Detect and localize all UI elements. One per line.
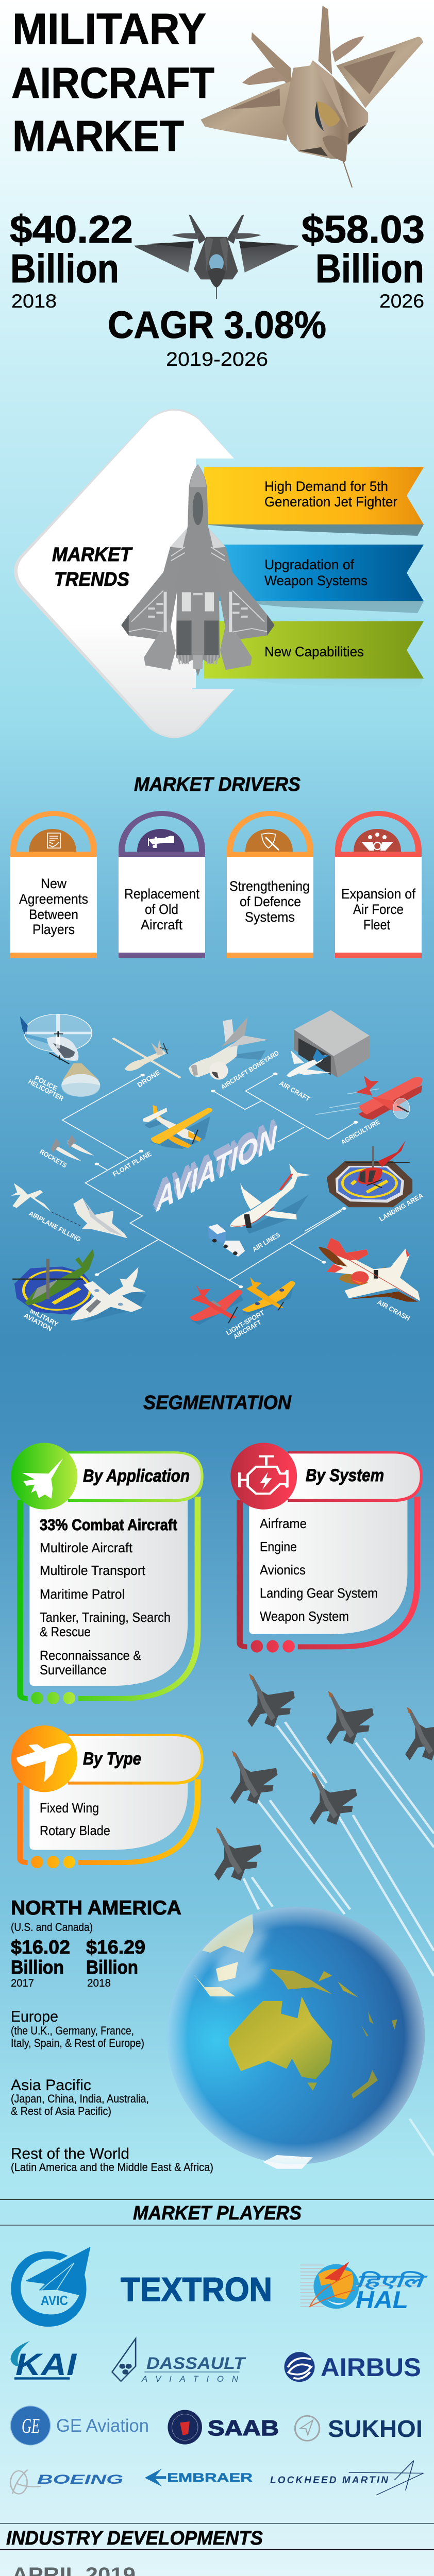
market trends heading	[52, 544, 133, 590]
stat: 2026 value	[302, 208, 425, 312]
labels for lower-middle illustrations: AIRCRAFT	[232, 1318, 263, 1341]
logo: KAI: KAI	[15, 2347, 77, 2382]
ribbon: weapon systems: Upgradation of	[264, 557, 354, 572]
panel: by system	[230, 1443, 423, 1653]
panel: company logos	[10, 2247, 428, 2495]
CAGR figure: 2019-2026	[166, 349, 268, 370]
logo: GE Aviation: GE	[22, 2414, 40, 2437]
text block: asia pacific: & Rest of Asia Pacific)	[11, 2105, 111, 2117]
labels for lower-middle illustrations: AVIATION	[23, 1311, 54, 1333]
drone	[111, 1038, 181, 1078]
text block: rest of the world: Rest of the World	[11, 2145, 129, 2162]
panel: by type: Fixed Wing	[40, 1800, 99, 1816]
labels for upper illustrations: DRONE	[136, 1069, 162, 1089]
refuelling jets	[11, 1183, 127, 1239]
icon: contract handshake	[47, 833, 60, 848]
panel: north america: Billion	[86, 1957, 138, 1978]
panel: by application: By Application	[83, 1466, 190, 1486]
title: AIRCRAFT	[11, 59, 214, 107]
labels for upper illustrations	[27, 1049, 381, 1178]
icon: air force wings	[361, 833, 393, 851]
landing area with helicopter	[327, 1141, 412, 1207]
text block: europe: Italy, Spain, & Rest of Europe)	[11, 2037, 144, 2049]
icon: white airplane	[16, 1743, 71, 1782]
panel: driver agreements: Players	[32, 922, 75, 937]
title: MARKET	[12, 112, 184, 160]
upper illustrations	[20, 1010, 423, 1161]
panel: by type: By Type	[83, 1749, 141, 1769]
panel: by application: 33% Combat Aircraft	[40, 1516, 177, 1534]
panel: driver replacement	[119, 811, 205, 958]
logo: SUKHOI: SUKHOI	[328, 2415, 423, 2442]
logo: BOEING	[10, 2470, 123, 2494]
ribbon: new capabilities: New Capabilities	[264, 644, 364, 659]
icon: shield and sword	[262, 833, 279, 850]
aviation 3D word: AVIATION	[152, 1112, 274, 1213]
logo: TEXTRON: TEXTRON	[121, 2270, 272, 2308]
panel: by application: & Rescue	[40, 1624, 91, 1639]
panel: driver replacement: Aircraft	[141, 917, 182, 933]
CAGR figure: CAGR 3.08%	[108, 303, 326, 346]
icon group: fighter formation with contrails	[214, 1674, 434, 2156]
panel: by application: Surveillance	[40, 1662, 107, 1677]
logo: GE Aviation	[10, 2406, 149, 2445]
flow connector lines upper	[62, 1073, 358, 1231]
police helicopter	[20, 1014, 100, 1097]
heading: industry developments: INDUSTRY DEVELOPMENTS	[6, 2528, 263, 2549]
boneyard plane	[189, 1017, 268, 1080]
panel: by system: Weapon System	[260, 1608, 349, 1624]
logo: LOCKHEED MARTIN	[270, 2461, 424, 2495]
logo: KAI	[10, 2341, 77, 2382]
white military jet	[71, 1267, 147, 1323]
logo: DASSAULT: AVIATION	[141, 2374, 239, 2384]
panel: driver agreements	[10, 811, 97, 958]
flow connector lines lower	[95, 1211, 342, 1288]
white diamond inner face	[18, 411, 234, 736]
stat: 2018 value: Billion	[10, 246, 119, 291]
text block: rest of the world	[11, 2145, 213, 2174]
market trends heading: MARKET	[52, 544, 133, 566]
logo: HAL: हिएलि	[356, 2270, 428, 2291]
labels for upper illustrations: AIRCRAFT BONEYARD	[220, 1049, 280, 1091]
labels for upper illustrations: HELICOPTER	[27, 1077, 65, 1103]
hangar	[287, 1010, 370, 1078]
labels for upper illustrations: AGRICULTURE	[340, 1117, 381, 1146]
text block: europe: (the U.K., Germany, France,	[11, 2024, 134, 2037]
aviation 3D word: AVIATION	[154, 1115, 276, 1216]
logo: DASSAULT: DASSAULT	[146, 2354, 246, 2372]
panel: driver air force	[335, 811, 422, 958]
panel: by application: Multirole Aircraft	[40, 1540, 133, 1555]
panel: north america: NORTH AMERICA	[11, 1897, 181, 1919]
panel: by application: Maritime Patrol	[40, 1586, 125, 1602]
aviation 3D word: AVIATION	[155, 1118, 277, 1219]
panel: by system: By System	[306, 1466, 384, 1485]
labels for upper illustrations: AIR CRAFT	[278, 1079, 311, 1103]
stat: 2018 value: 2018	[11, 291, 57, 312]
stat: 2026 value: 2026	[379, 291, 424, 312]
labels for upper illustrations: ROCKETS	[38, 1148, 68, 1170]
labels for lower-middle illustrations: LANDING AREA	[378, 1191, 425, 1223]
text block: rest of the world: (Latin America and the Middle East & Africa)	[11, 2161, 213, 2174]
ribbon: new capabilities	[204, 621, 424, 679]
title	[11, 5, 214, 160]
panel: by application: Reconnaissance &	[40, 1648, 141, 1663]
panel: driver air force: Air Force	[353, 902, 404, 917]
panel: north america: 2017	[11, 1977, 34, 1989]
panel: by system: Airframe	[260, 1516, 307, 1531]
panel: market trends	[14, 409, 424, 738]
yellow light-sport plane	[242, 1277, 295, 1315]
panel: driver agreements: Agreements	[19, 891, 88, 907]
icon: tan fighter jet	[201, 6, 423, 188]
logo: SAAB: SAAB	[208, 2416, 279, 2440]
logo: GE Aviation: GE Aviation	[56, 2416, 149, 2436]
labels for lower-middle illustrations	[23, 1191, 425, 1341]
lower illustrations	[12, 1238, 420, 1325]
logo: AIRBUS: AIRBUS	[321, 2353, 421, 2382]
stat: 2026 value: $58.03	[302, 208, 425, 251]
panel: north america: $16.02	[11, 1937, 70, 1958]
air crash	[319, 1238, 420, 1302]
panel: driver agreements: New	[41, 876, 66, 891]
text block: europe	[11, 2008, 144, 2049]
logo: DASSAULT	[112, 2338, 246, 2384]
labels for lower-middle illustrations: AIR LINES	[251, 1231, 281, 1253]
logo: HAL: HAL	[356, 2286, 408, 2313]
heading: market drivers: MARKET DRIVERS	[134, 774, 301, 795]
panel: driver air force: Fleet	[363, 917, 390, 933]
ribbon shadow	[204, 524, 424, 690]
red biplane	[315, 1076, 423, 1120]
heading: segmentation: SEGMENTATION	[143, 1392, 292, 1414]
CAGR figure	[108, 303, 326, 370]
white arrow diamond shape	[14, 409, 234, 738]
panel: north america	[11, 1897, 181, 1989]
panel: by application: Multirole Transport	[40, 1563, 146, 1578]
heading: market players: MARKET PLAYERS	[133, 2202, 302, 2224]
text block: asia pacific	[11, 2077, 149, 2117]
truck	[208, 1224, 245, 1257]
logo: HAL	[301, 2262, 428, 2313]
panel: driver defence: Systems	[245, 909, 295, 925]
ribbon: high demand: High Demand for 5th	[264, 479, 388, 494]
panel: by system: Landing Gear System	[260, 1585, 378, 1601]
logo: EMBRAER: EMBRAER	[167, 2471, 253, 2485]
labels for upper illustrations: FLOAT PLANE	[111, 1149, 153, 1178]
panel: by system: Engine	[260, 1539, 297, 1554]
stat: 2018 value	[10, 208, 133, 312]
panel: by system: Avionics	[260, 1562, 306, 1578]
logo: AVIC: AVIC	[41, 2293, 68, 2308]
panel: driver defence	[227, 811, 313, 958]
ribbon: weapon systems	[216, 545, 424, 601]
panel: north america: (U.S. and Canada)	[11, 1921, 93, 1934]
panel: north america: 2018	[87, 1977, 111, 1989]
icon: white fighter	[22, 1458, 63, 1499]
text block: asia pacific: Asia Pacific	[11, 2077, 91, 2094]
logo: SAAB	[168, 2410, 279, 2445]
panel: north america: $16.29	[86, 1937, 145, 1958]
icon: grey top view fighter	[121, 464, 275, 676]
labels for upper illustrations: POLICE	[34, 1074, 59, 1092]
aviation 3D word: AVIATION	[153, 1114, 275, 1215]
panel: by application: Tanker, Training, Search	[40, 1609, 171, 1625]
logo: AVIC	[11, 2247, 91, 2327]
logo: AIRBUS	[284, 2352, 421, 2382]
logo: EMBRAER	[145, 2468, 253, 2486]
lower-middle illustrations	[11, 1141, 412, 1257]
text block: europe: Europe	[11, 2008, 58, 2025]
rockets	[51, 1135, 94, 1161]
logo: LOCKHEED MARTIN: LOCKHEED MARTIN	[270, 2475, 389, 2486]
panel: by application	[11, 1443, 204, 1704]
ribbon: high demand: Generation Jet Fighter	[264, 494, 397, 510]
aviation 3D word: AVIATION	[155, 1117, 276, 1218]
labels for lower-middle illustrations: AIRPLANE FILLING	[28, 1209, 82, 1243]
business jet	[230, 1163, 311, 1234]
yellow float plane	[143, 1105, 212, 1149]
chart: aviation isometric flowchart	[11, 1010, 425, 1341]
red light-sport plane	[190, 1284, 244, 1325]
panel: driver defence: of Defence	[240, 894, 301, 909]
icon: biplane	[148, 836, 174, 848]
title: MILITARY	[12, 5, 206, 53]
panel: by type	[11, 1725, 204, 1868]
panel: by type: Rotary Blade	[40, 1823, 110, 1838]
icon: globe	[167, 1907, 425, 2169]
stat: 2018 value: $40.22	[10, 208, 133, 251]
icon: dark fighter jet	[134, 214, 298, 299]
text block: asia pacific: (Japan, China, India, Australia,	[11, 2092, 149, 2105]
panel: driver replacement: Replacement	[124, 886, 199, 902]
panel: driver defence: Strengthening	[229, 878, 310, 894]
labels for lower-middle illustrations: LIGHT-SPORT	[225, 1309, 265, 1337]
labels for lower-middle illustrations: AIR CRASH	[376, 1298, 411, 1323]
market trends heading: TRENDS	[54, 569, 129, 590]
logo: BOEING: BOEING	[37, 2472, 123, 2487]
panel: driver agreements: Between	[29, 907, 78, 922]
ribbon: high demand	[204, 467, 424, 524]
icon: engine	[240, 1456, 287, 1494]
military aviation pad and helicopter	[12, 1249, 94, 1315]
panel: driver replacement: of Old	[145, 902, 178, 917]
panel: north america: Billion	[11, 1957, 64, 1978]
labels for lower-middle illustrations: MILITARY	[29, 1307, 60, 1328]
panel: driver air force: Expansion of	[341, 886, 415, 902]
ribbon: weapon systems: Weapon Systems	[264, 573, 368, 588]
